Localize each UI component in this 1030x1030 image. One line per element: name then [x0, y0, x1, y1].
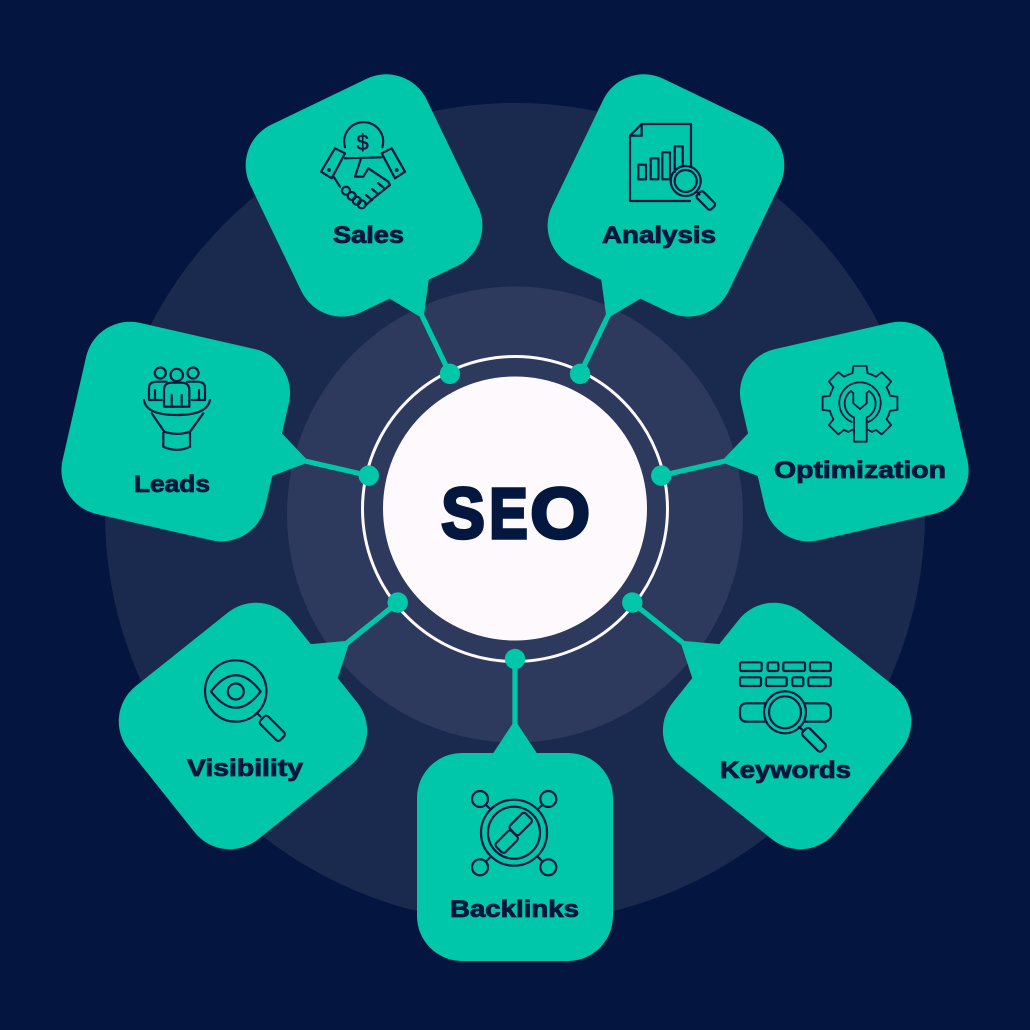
title: S: [441, 475, 485, 554]
label: Keywords: Keywords: [720, 757, 851, 784]
thin white ring: [362, 356, 668, 662]
coin dollar sign: $: [356, 130, 369, 155]
panel: backlinks: [417, 649, 613, 961]
callout shape: analysis: [487, 59, 799, 426]
label: Backlinks: Backlinks: [450, 896, 579, 923]
icon: eye in magnifier: [205, 660, 286, 742]
centre circle with title: [383, 376, 647, 640]
callout shape: visibility: [101, 520, 467, 867]
icon: keyword blocks with search bar: [740, 662, 831, 753]
label: Sales: Sales: [333, 222, 404, 249]
icon: handshake with coin: [321, 122, 405, 208]
title: E: [489, 475, 528, 554]
icon: report with magnifier: [630, 124, 716, 211]
icon: chain link network: [472, 791, 556, 875]
callout shape: optimization: [629, 313, 977, 573]
callout shape: keywords: [563, 520, 929, 867]
panel: sales: [231, 59, 543, 426]
callout shape: leads: [53, 313, 401, 573]
callout shape: backlinks: [417, 649, 613, 961]
callout shape: sales: [231, 59, 543, 426]
label: Analysis: Analysis: [602, 222, 716, 249]
panel: analysis: [487, 59, 799, 426]
label: Optimization: Optimization: [774, 457, 946, 484]
icon: people funnel: [144, 368, 210, 450]
icon: gear with wrench: [823, 366, 897, 442]
panel: keywords: [563, 520, 929, 867]
panel: visibility: [101, 520, 467, 867]
label: Visibility: Visibility: [187, 755, 304, 782]
inner ring: [287, 286, 743, 742]
label: Leads: Leads: [134, 471, 210, 498]
outer ring: [105, 103, 925, 923]
panel: leads: [53, 313, 401, 573]
panel: optimization: [629, 313, 977, 573]
title: O: [530, 475, 590, 554]
